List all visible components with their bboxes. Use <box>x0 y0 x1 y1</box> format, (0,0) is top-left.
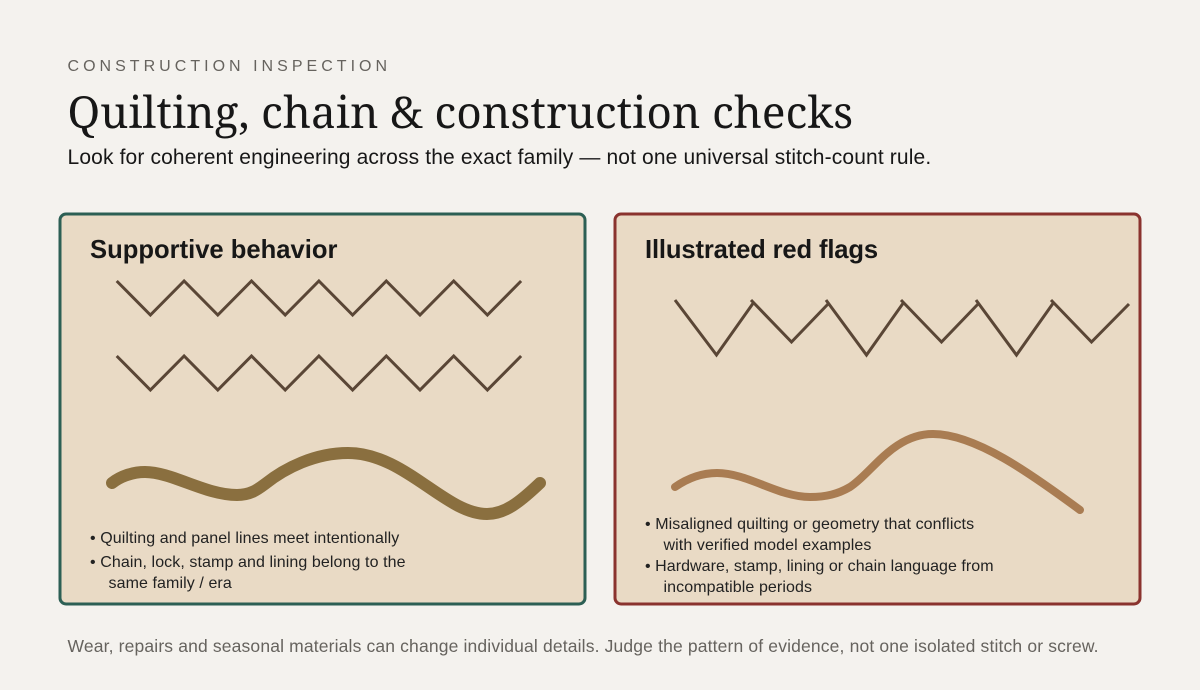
eyebrow: CONSTRUCTION INSPECTION <box>68 58 391 75</box>
panel heading: supportive behavior: Supportive behavior <box>90 236 337 264</box>
red flags bullet list: with verified model examples <box>664 537 871 554</box>
red flags bullet list: • Hardware, stamp, lining or chain language from <box>645 558 994 575</box>
footer note: Wear, repairs and seasonal materials can change individual details. Judge the pattern of evidence, not one isolated stitch or screw. <box>68 636 1099 656</box>
title: Quilting, chain & construction checks <box>68 81 853 141</box>
red flags bullet list <box>645 516 994 596</box>
red flags bullet list: • Misaligned quilting or geometry that conflicts <box>645 516 974 533</box>
panel heading: red flags: Illustrated red flags <box>645 236 878 264</box>
subtitle: Look for coherent engineering across the exact family — not one universal stitch-count rule. <box>68 146 931 169</box>
supportive bullet list: • Chain, lock, stamp and lining belong to the <box>90 554 406 571</box>
red flags bullet list: incompatible periods <box>664 579 812 596</box>
supportive bullet list: • Quilting and panel lines meet intentionally <box>90 530 399 547</box>
supportive bullet list <box>90 530 406 592</box>
supportive bullet list: same family / era <box>108 575 232 592</box>
